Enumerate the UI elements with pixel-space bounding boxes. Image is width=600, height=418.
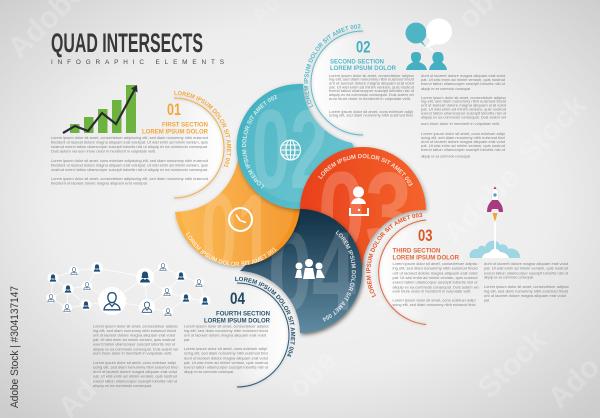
section 4 body text: exerci tation ullamcorper suscipit lobortis nisl ut	[93, 379, 177, 383]
icon: globe	[280, 140, 300, 160]
section 4 body text: dunt ut laoreet dolore magna aliquam erat volut	[93, 370, 177, 374]
section 1 heading: FIRST SECTION	[162, 122, 208, 128]
section 3 heading: LOREM IPSUM DOLOR	[392, 254, 459, 262]
section 4 body text: scing elit, sed diam nonummy nibh euismod tinci	[93, 365, 178, 369]
section 2 body text: aliquip ex ea commodo consequat. Duis autem vel	[421, 115, 506, 119]
section 2 body text: exerci tation ullamcorper suscipit lobortis nisl ut	[421, 148, 505, 152]
section 4 number: 04	[230, 289, 245, 308]
petal: red 03: 03	[318, 149, 412, 274]
section 2 body text: pat. Ut wisi enim ad minim veniam, quis nostrud	[421, 78, 505, 82]
section 4 body text: unt ut laoreet dolore magna aliquam erat volut	[93, 333, 175, 337]
section 2 body text: Lorem ipsum dolor sit amet, cons ectetuer adipi	[421, 132, 505, 136]
section 4 body text: scing elit, sed diam nonummy nibh euismod tinci	[184, 352, 268, 356]
section 4 body text: Lorem ipsum dolor sit amet, cons ectetuer adipi	[93, 361, 176, 365]
section 2 body text: aliquip ex ea commodo consequat.	[421, 154, 471, 158]
section 4 body text: pat. Ut wisi enim ad minim veniam, quis nostrud	[93, 338, 175, 342]
watermarks: Adobe	[437, 161, 526, 250]
section 2 body text: pat. Ut wisi enim ad minim veniam, quis nostrud	[421, 108, 506, 112]
section 2 heading	[330, 58, 396, 72]
petal: orange 01	[174, 156, 300, 270]
section 3 body text: Lorem ipsum dolor sit amet, cons ectetuer adipi	[392, 298, 476, 302]
section 2 body text: pat. Ut wisi enim ad minim veniam, quis nostrud	[329, 85, 414, 89]
section 2 heading: LOREM IPSUM DOLOR	[330, 65, 396, 72]
section 4 body text: dunt ut laoreet dolore magna aliquam erat volut	[184, 356, 268, 360]
petal: orange 01: 01	[201, 171, 273, 296]
section 1 curved text: LOREM IPSUM DOLOR SIT AMET 001	[174, 90, 232, 168]
panel: section 1	[51, 90, 232, 200]
section 4 body text: unt ut laoreet dolore magna aliquam erat volut	[184, 333, 266, 337]
petal: red 03: LOREM IPSUM DOLOR SIT AMET 003	[318, 154, 413, 186]
section 1 body text: Lorem ipsum dolor sit amet, consectetuer adipiscing elit, sed diam nonummy nibh euismod	[51, 136, 208, 140]
section 4 body text: aliquip ex ea commodo consequat.	[93, 384, 152, 388]
section 3 body text: unt ut laoreet dolore magna aliquam erat volut	[392, 271, 478, 275]
section 4 body text: pat. Ut wisi enim ad minim veniam, quis nostrud	[93, 375, 177, 379]
title: QUAD INTERSECTS	[51, 28, 203, 58]
section 2 body text: Lorem ipsum dolor sit amet, consectetuer adipisc	[421, 96, 506, 100]
section 2 body text: eum iriure dolor in hendrerit in vulputate velit.	[329, 97, 411, 101]
section 3 body text: scing elit, sed diam nonummy nibh euismod tinci	[392, 303, 476, 307]
section 2 body text: eum iriure dolor in hendrerit in vulputate velit.	[421, 122, 500, 126]
section 2 body text: ing elit, sed diam nonummy nibh euismod tincid	[421, 100, 506, 104]
watermarks: Stock	[472, 324, 553, 405]
petal: teal 02: 02	[252, 87, 328, 212]
section 1 body text: Lorem ipsum dolor sit amet, cons ectetuer adipiscing elit, sed diam nonummy nibh euismod	[51, 159, 208, 163]
section 4 heading: LOREM IPSUM DOLOR	[204, 318, 270, 324]
section 3 heading: THIRD SECTION	[392, 248, 441, 254]
section 2 body text: exerci tation ullamcorper suscipit lobortis nisl ut	[421, 111, 506, 115]
section 3 body text: ing elit, sed diam nonummy nibh euismod tincid	[484, 290, 568, 294]
section 4 body text: aliquip ex ea commodo consequat. Duis autem vel	[93, 347, 178, 351]
section 2 body text: scing elit, sed diam nonummy nibh euismod tinci	[329, 114, 413, 118]
section 1 body text: nostrud exerci tation ullamcorper suscipit lobortis nisl ut aliquip ex ea commodo consequat.	[51, 145, 208, 149]
section 1 body text: tincidunt ut laoreet dolore magna aliquam erat volutpat.	[51, 182, 148, 186]
petal: dark 04 lower layer	[240, 209, 362, 334]
section 2 body text	[329, 74, 506, 158]
section 2 body text: Lorem ipsum dolor sit amet, cons ectetuer adipi	[329, 110, 413, 114]
section 1 body text: tincidunt ut laoreet dolore magna aliquam erat volutpat. Ut wisi enim ad minim veniam, quis	[51, 140, 208, 144]
section 3 body text: ing elit, sed diam nonummy nibh euismod tincid	[392, 267, 478, 271]
section 4 heading: FOURTH SECTION	[216, 310, 270, 318]
icon: growth chart	[63, 85, 138, 133]
section 2 body text: unt ut laoreet dolore magna aliquam erat volut	[329, 82, 414, 86]
section 4 body text: ing elit, sed diam nonummy nibh euismod tincid	[184, 329, 268, 333]
section 3 body text: Lorem ipsum dolor sit amet, consectetuer adipisc	[484, 285, 569, 289]
section 4 body text: Lorem ipsum dolor sit amet, cons ectetuer adipi	[184, 347, 267, 351]
section 2 body text: exerci tation ullamcorper suscipit lobortis nisl ut	[329, 89, 414, 93]
section 3 body text: pat. Ut wisi enim ad minim veniam, quis nostrud	[484, 267, 568, 271]
petal: orange 01: LOREM IPSUM DOLOR SIT AMET 001	[186, 232, 277, 266]
icon: clock	[229, 208, 252, 231]
section 4 body text	[93, 324, 269, 388]
section 3 curved text: LOREM IPSUM DOLOR SIT AMET 003	[366, 212, 422, 298]
section 4 body text: pat.	[184, 338, 190, 342]
section 4 body text: eum iriure dolor in hendrerit in vulputate velit.	[93, 352, 172, 356]
section 1 heading	[142, 122, 208, 136]
section 3 body text: eum iriure dolor in hendrerit in vulputate velit.	[392, 290, 472, 294]
section 2 body text: unt ut laoreet dolore magna aliquam erat volut	[421, 104, 506, 108]
section 3 heading	[392, 248, 459, 262]
section 2 number: 02	[356, 38, 370, 56]
section 3 number: 03	[418, 226, 432, 245]
section 1 body text: Lorem ipsum dolor sit amet, consectetuer adipiscing elit, sed diam nonummy nibh euismod	[51, 177, 208, 181]
petal: dark 04 lower layer: 04	[268, 209, 356, 334]
icon: person at laptop	[349, 186, 369, 216]
panel: section 2	[304, 24, 506, 158]
icon: group of people	[295, 259, 325, 279]
watermarks: Stock	[512, 89, 593, 170]
section 3 body text	[392, 262, 569, 307]
section 3 body text: pat. Ut wisi enim ad minim veniam, quis nostrud	[392, 276, 478, 280]
section 1 number: 01	[167, 100, 181, 119]
section 2 curved text: LOREM IPSUM DOLOR SIT AMET 002	[304, 24, 361, 108]
watermarks: Stock	[362, 234, 443, 315]
section 2 body text: dunt ut laoreet dolore magna aliquam erat volut	[421, 140, 505, 144]
section 1 body text: nostrud exerci tation ullamcorper suscipit lobortis nisl ut aliquip ex ea commodo consequat.	[51, 168, 208, 172]
section 1 body text: tincidunt ut laoreet dolore magna aliquam erat volutpat. Ut wisi enim ad minim veniam, quis	[51, 164, 208, 168]
section 1 heading: LOREM IPSUM DOLOR	[142, 128, 208, 136]
section 4 body text: exerci tation ullamcorper suscipit lobortis nisl ut	[93, 343, 175, 347]
section 2 body text: pat. Ut wisi enim ad minim veniam, quis nostrud	[421, 144, 505, 148]
petal: dark 04 upper layer	[300, 208, 366, 337]
section 2 body text: exerci tation ullamcorper suscipit lobortis nisl ut	[421, 82, 505, 86]
section 2 body text: scing elit, sed diam nonummy nibh euismod tinci	[421, 136, 505, 140]
section 4 curved text: LOREM IPSUM DOLOR SIT AMET 004	[235, 276, 296, 357]
panel: section 4	[93, 276, 296, 389]
section 4 body text: pat. Ut wisi enim ad minim veniam, quis nostrud	[184, 361, 268, 365]
petal: dark 04 upper layer: LOREM IPSUM DOLOR SIT AMET 004	[322, 230, 356, 322]
section 2 body text: aliquip ex ea commodo consequat.	[421, 87, 471, 91]
section 4 body text: Lorem ipsum dolor sit amet, consectetuer adipisc	[93, 324, 178, 328]
section 2 body text: dunt ut laoreet dolore magna aliquam erat volut	[421, 74, 505, 78]
section 3 body text: pat.	[484, 299, 490, 303]
icon: speech bubbles and two people	[406, 18, 452, 70]
section 3 body text: exerci tation ullamcorper suscipit lobortis nisl ut	[392, 281, 478, 285]
section 4 body text: exerci tation ullamcorper suscipit lobortis nisl ut	[184, 365, 268, 369]
section 3 body text: Lorem ipsum dolor sit amet, consectetuer adipisc	[392, 262, 478, 266]
title	[51, 28, 224, 66]
section 3 body text: unt ut laoreet dolore magna aliquam erat volut	[484, 294, 566, 298]
icon: people network	[46, 262, 210, 317]
section 2 body text: ing elit, sed diam nonummy nibh euismod tincid	[329, 78, 414, 82]
icon: rocket launch	[470, 186, 520, 258]
section 4 body text: aliquip ex ea commodo consequat.	[184, 370, 234, 374]
section 2 body text: Lorem ipsum dolor sit amet, consectetuer adipisc	[329, 74, 414, 78]
section 3 body text: aliquip ex ea commodo consequat.	[484, 276, 534, 280]
section 2 body text: aliquip ex ea commodo consequat. Duis autem vel	[329, 93, 414, 97]
section 4 heading	[204, 310, 270, 324]
section 2 heading: SECOND SECTION	[330, 58, 384, 66]
section 1 body text: Duis autem vel eum iriure dolor in hendrerit in vulputate velit.	[51, 150, 156, 154]
section 3 body text: exerci tation ullamcorper suscipit lobortis nisl ut	[484, 271, 568, 275]
section 4 body text: ing elit, sed diam nonummy nibh euismod tincid	[93, 329, 176, 333]
watermarks: obe	[282, 344, 343, 405]
petal: dark 04 upper layer: 04	[268, 209, 356, 334]
section 3 body text: dunt ut laoreet dolore magna aliquam erat volut	[484, 262, 568, 266]
section 1 body text	[51, 136, 208, 186]
stock id label: Adobe Stock | #304137147	[9, 286, 21, 408]
title: INFOGRAPHIC ELEMENTS	[51, 59, 224, 66]
section 4 body text: Lorem ipsum dolor sit amet, consectetuer adipisc	[184, 324, 269, 328]
petal: teal 02: LOREM IPSUM DOLOR SIT AMET 002	[242, 94, 278, 189]
section 3 body text: aliquip ex ea commodo consequat. Duis autem vel	[392, 285, 479, 289]
panel: section 3	[366, 212, 569, 326]
